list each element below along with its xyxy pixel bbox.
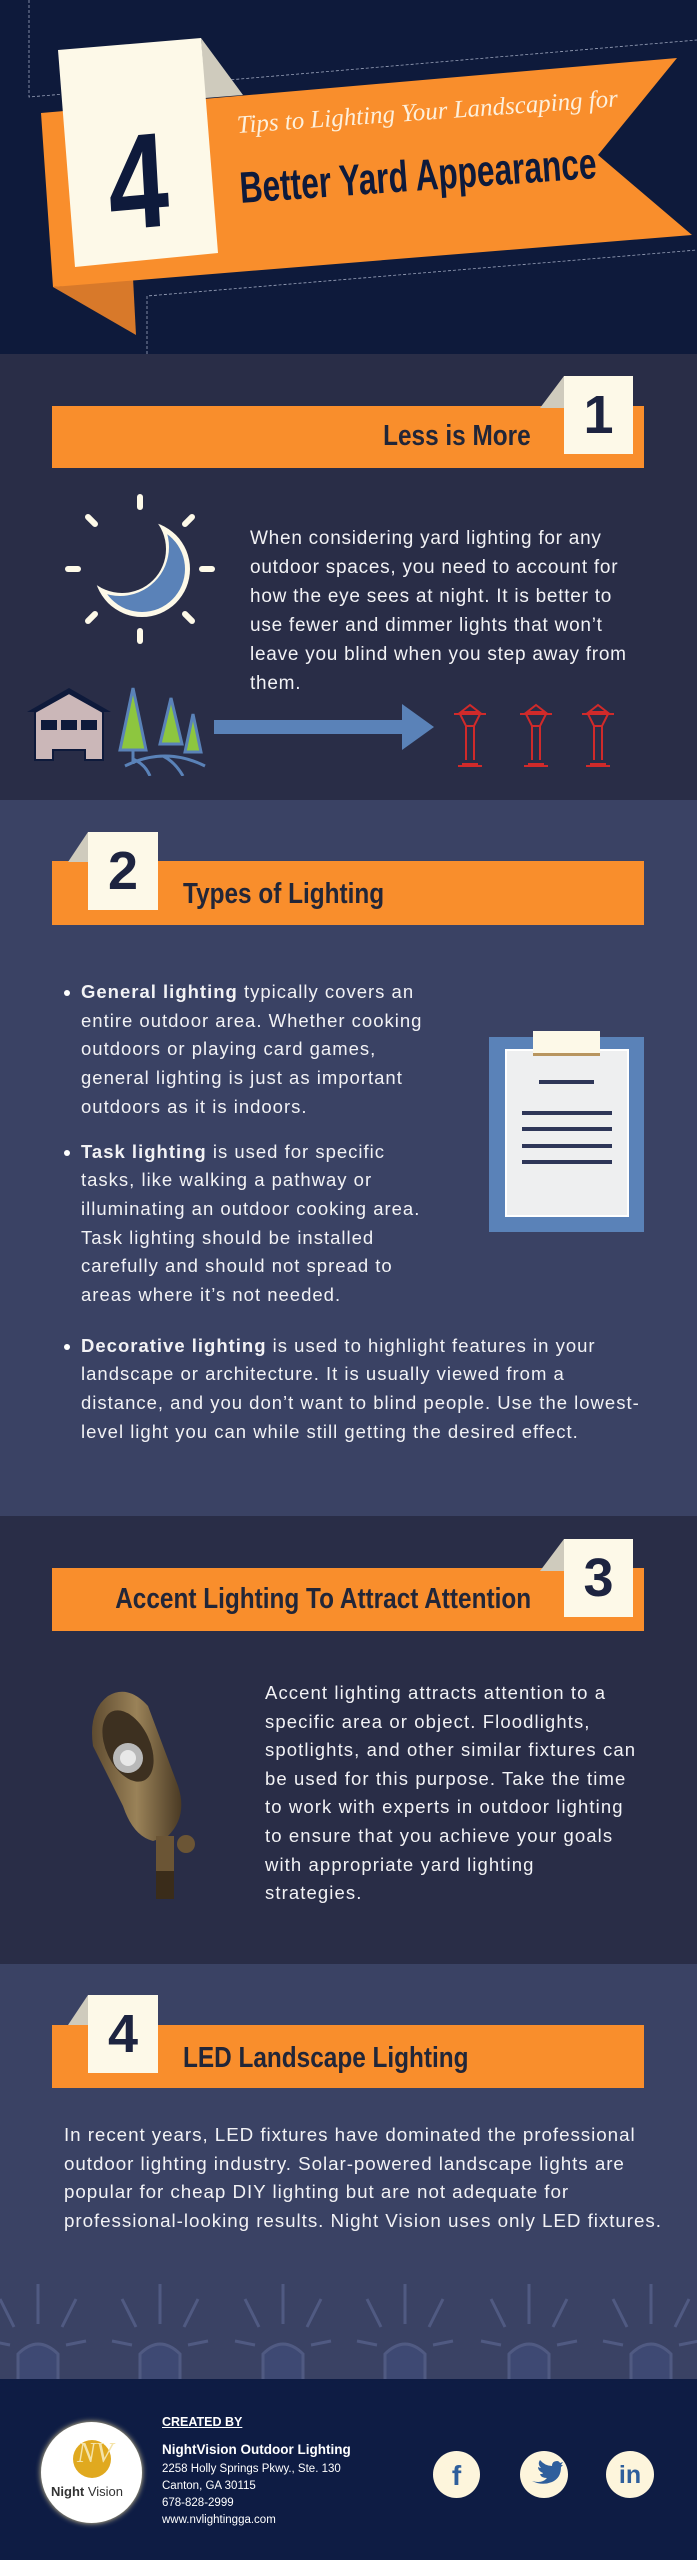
bullet list: landscape or architecture. It is usually viewed from a bbox=[81, 1363, 565, 1384]
text: accent: strategies. bbox=[265, 1882, 362, 1903]
text: less is more bbox=[250, 528, 627, 694]
image: spotlight fixture bbox=[92, 1692, 195, 1899]
logo bbox=[41, 2422, 142, 2523]
header bbox=[0, 0, 697, 354]
main title: Better Yard Appearance bbox=[238, 139, 598, 213]
heading: Types of Lighting: Types of Lighting bbox=[183, 878, 384, 910]
bullet list: entire outdoor area. Whether cooking bbox=[81, 1010, 422, 1031]
heading bar 4 bbox=[52, 2025, 644, 2088]
credits text bbox=[162, 2415, 351, 2526]
footer bbox=[0, 2379, 697, 2560]
icon: facebook: f bbox=[452, 2460, 461, 2491]
number 1 bbox=[564, 376, 633, 454]
text: accent: be used for this purpose. Take the time bbox=[265, 1768, 626, 1789]
bullet list: level light you can while still getting the desired effect. bbox=[81, 1421, 579, 1442]
bullet list: outdoors or playing card games, bbox=[81, 1038, 376, 1059]
number 1: 1 bbox=[583, 385, 614, 445]
logo: Night Vision bbox=[51, 2484, 123, 2499]
text: accent: specific area or object. Floodlights, bbox=[265, 1711, 591, 1732]
bullet list: Task lighting should be installed bbox=[81, 1227, 374, 1248]
bullet list: tasks, like walking a pathway or bbox=[81, 1169, 372, 1190]
bullet list: outdoors as it is indoors. bbox=[81, 1096, 308, 1117]
credits text: www.nvlightingga.com bbox=[162, 2514, 276, 2526]
icon: facebook bbox=[433, 2451, 480, 2498]
credits text: CREATED BY bbox=[162, 2415, 242, 2429]
text: accent: spotlights, and other similar fixtures can bbox=[265, 1739, 636, 1760]
number 3: 3 bbox=[583, 1548, 614, 1608]
text: LED: popular for cheap DIY lighting but are not adequate for bbox=[64, 2181, 569, 2202]
credits text: 2258 Holly Springs Pkwy., Ste. 130 bbox=[162, 2463, 341, 2475]
text: less is more: how the eye sees at night. It is better to bbox=[250, 586, 612, 607]
big number 4: 4 bbox=[104, 104, 172, 259]
bullet list: Decorative lighting is used to highlight features in your bbox=[81, 1335, 596, 1356]
fold bbox=[201, 38, 243, 98]
panel: section 2 bbox=[0, 800, 697, 1516]
bullet list: Task lighting is used for specific bbox=[81, 1141, 385, 1162]
bullet list: general lighting is just as important bbox=[81, 1067, 403, 1088]
ribbon bbox=[41, 58, 692, 287]
bullet list: areas where it’s not needed. bbox=[81, 1284, 341, 1305]
icon: linkedin: in bbox=[619, 2461, 641, 2489]
heading: Accent Lighting: Accent Lighting To Attract Attention bbox=[115, 1583, 531, 1615]
text: less is more: When considering yard lighting for any bbox=[250, 528, 602, 549]
icon: moon bbox=[65, 494, 215, 644]
icon: twitter bbox=[520, 2451, 568, 2498]
text: less is more: leave you blind when you step away from bbox=[250, 644, 627, 665]
text: LED: outdoor lighting industry. Solar-powered landscape lights are bbox=[64, 2153, 625, 2174]
panel: section 3 bbox=[0, 1516, 697, 1964]
logo: NV bbox=[77, 2438, 113, 2469]
number 3 bbox=[564, 1539, 633, 1617]
cream box bbox=[58, 38, 218, 267]
bullet list: distance, and you don’t want to blind people. Use the lowest- bbox=[81, 1392, 640, 1413]
panel: section 1 bbox=[28, 376, 644, 776]
number 4: 4 bbox=[108, 2004, 138, 2064]
ribbon tail bbox=[53, 278, 136, 335]
text: LED bbox=[64, 2124, 662, 2231]
text: accent: with appropriate yard lighting bbox=[265, 1854, 535, 1875]
heading bar 3 bbox=[52, 1568, 644, 1631]
text: accent: Accent lighting attracts attention to a bbox=[265, 1682, 606, 1703]
number 2: 2 bbox=[108, 841, 138, 901]
decorative bulbs bbox=[0, 2284, 697, 2379]
text: less is more: outdoor spaces, you need to account for bbox=[250, 557, 618, 578]
icon: lamps bbox=[454, 704, 614, 767]
heading: Less is More: Less is More bbox=[383, 420, 531, 452]
icon: clipboard bbox=[489, 1031, 644, 1232]
text: LED: professional-looking results. Night Vision uses only LED fixtures. bbox=[64, 2210, 662, 2231]
heading bar 2 bbox=[52, 861, 644, 925]
number 4 bbox=[88, 1995, 158, 2073]
bullet list: illuminating an outdoor cooking area. bbox=[81, 1198, 420, 1219]
credits text: Canton, GA 30115 bbox=[162, 2480, 256, 2492]
subtitle script: Tips to Lighting Your Landscaping for bbox=[236, 85, 619, 139]
panel: section 4 bbox=[0, 1964, 697, 2379]
heading bar 1 bbox=[52, 406, 644, 468]
text: accent bbox=[265, 1682, 636, 1903]
arrow bbox=[214, 704, 434, 750]
text: accent: to ensure that you achieve your goals bbox=[265, 1825, 613, 1846]
credits text: NightVision Outdoor Lighting bbox=[162, 2442, 351, 2457]
icon: linkedin bbox=[606, 2451, 654, 2498]
credits text: 678-828-2999 bbox=[162, 2497, 234, 2509]
text: accent: to work with experts in outdoor lighting bbox=[265, 1796, 624, 1817]
text: less is more: use fewer and dimmer lights that won’t bbox=[250, 615, 603, 636]
icon: house and trees bbox=[28, 688, 206, 776]
text: LED: In recent years, LED fixtures have dominated the professional bbox=[64, 2124, 636, 2145]
bullet list: carefully and should not spread to bbox=[81, 1255, 393, 1276]
bullet list: General lighting typically covers an bbox=[81, 981, 414, 1002]
bullet list bbox=[64, 981, 640, 1442]
text: less is more: them. bbox=[250, 673, 301, 694]
heading: LED: LED Landscape Lighting bbox=[183, 2042, 469, 2074]
number 2 bbox=[88, 832, 158, 910]
